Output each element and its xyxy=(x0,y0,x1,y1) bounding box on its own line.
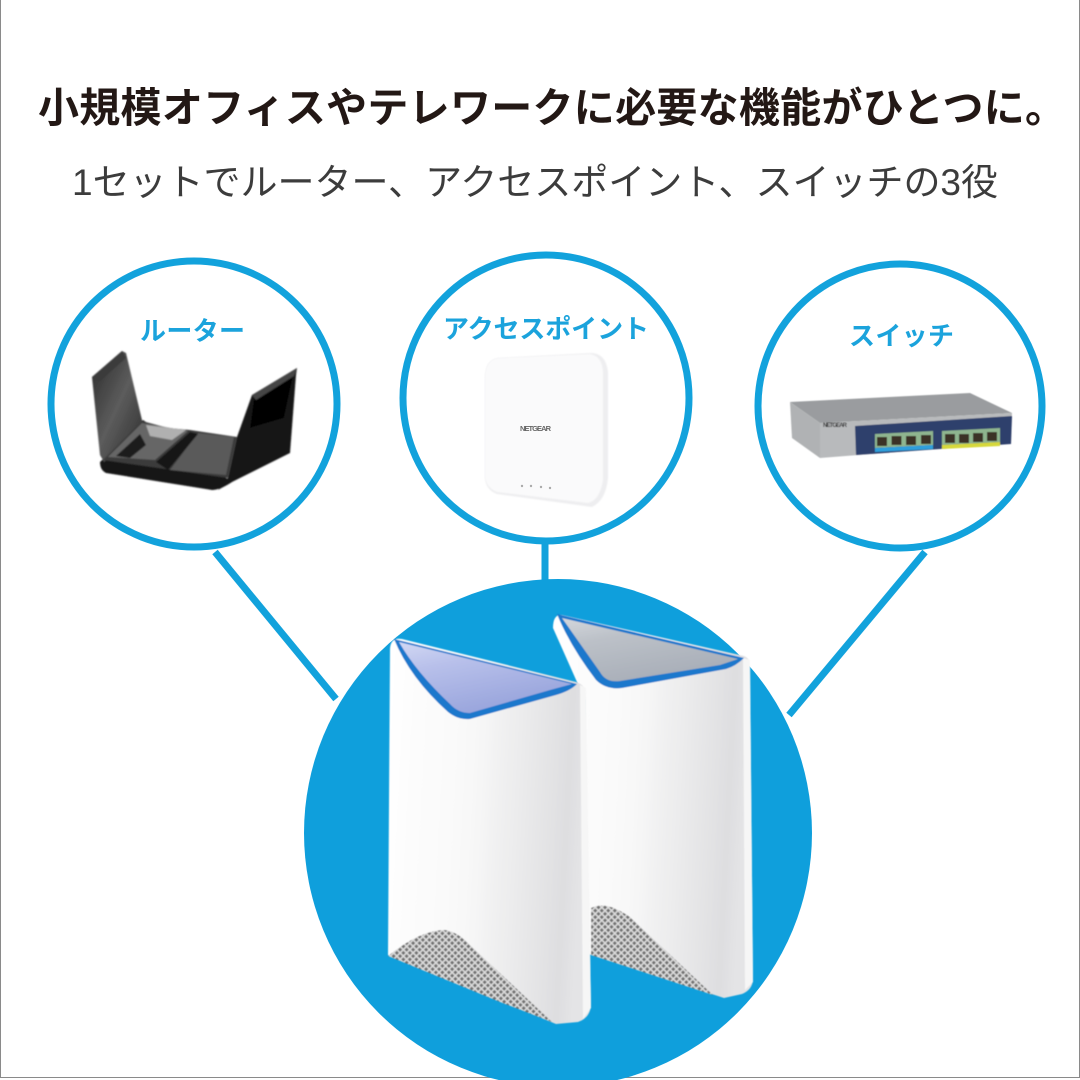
title: 小規模オフィスやテレワークに必要な機能がひとつに。 xyxy=(38,85,1066,131)
brand mark: NETGEAR xyxy=(823,423,848,429)
panel: switch circle xyxy=(758,264,1042,548)
label: router: ルーター xyxy=(140,316,245,346)
panel: router circle xyxy=(51,261,337,547)
icon: router xyxy=(92,351,297,490)
status lights xyxy=(521,485,551,489)
rear side strip xyxy=(743,658,753,990)
front speaker mesh xyxy=(388,930,552,1022)
main blue circle xyxy=(304,579,812,1080)
panel: access point circle xyxy=(403,255,689,541)
front top panel xyxy=(394,639,577,719)
connector: access point to main unit xyxy=(542,544,548,584)
connector: switch to main unit xyxy=(789,552,925,715)
rear top panel xyxy=(557,614,744,688)
product: rear unit xyxy=(553,614,753,998)
label: access point: アクセスポイント xyxy=(443,314,649,344)
connector: router to main unit xyxy=(215,552,336,699)
icon: access point xyxy=(485,353,608,507)
icon: network switch xyxy=(790,393,1012,458)
label: switch: スイッチ xyxy=(849,321,954,351)
brand mark: NETGEAR xyxy=(520,424,552,433)
product: front unit xyxy=(388,639,591,1024)
rear speaker mesh xyxy=(591,905,713,995)
subtitle: 1セットでルーター、アクセスポイント、スイッチの3役 xyxy=(72,162,998,203)
front side strip xyxy=(580,685,591,1019)
